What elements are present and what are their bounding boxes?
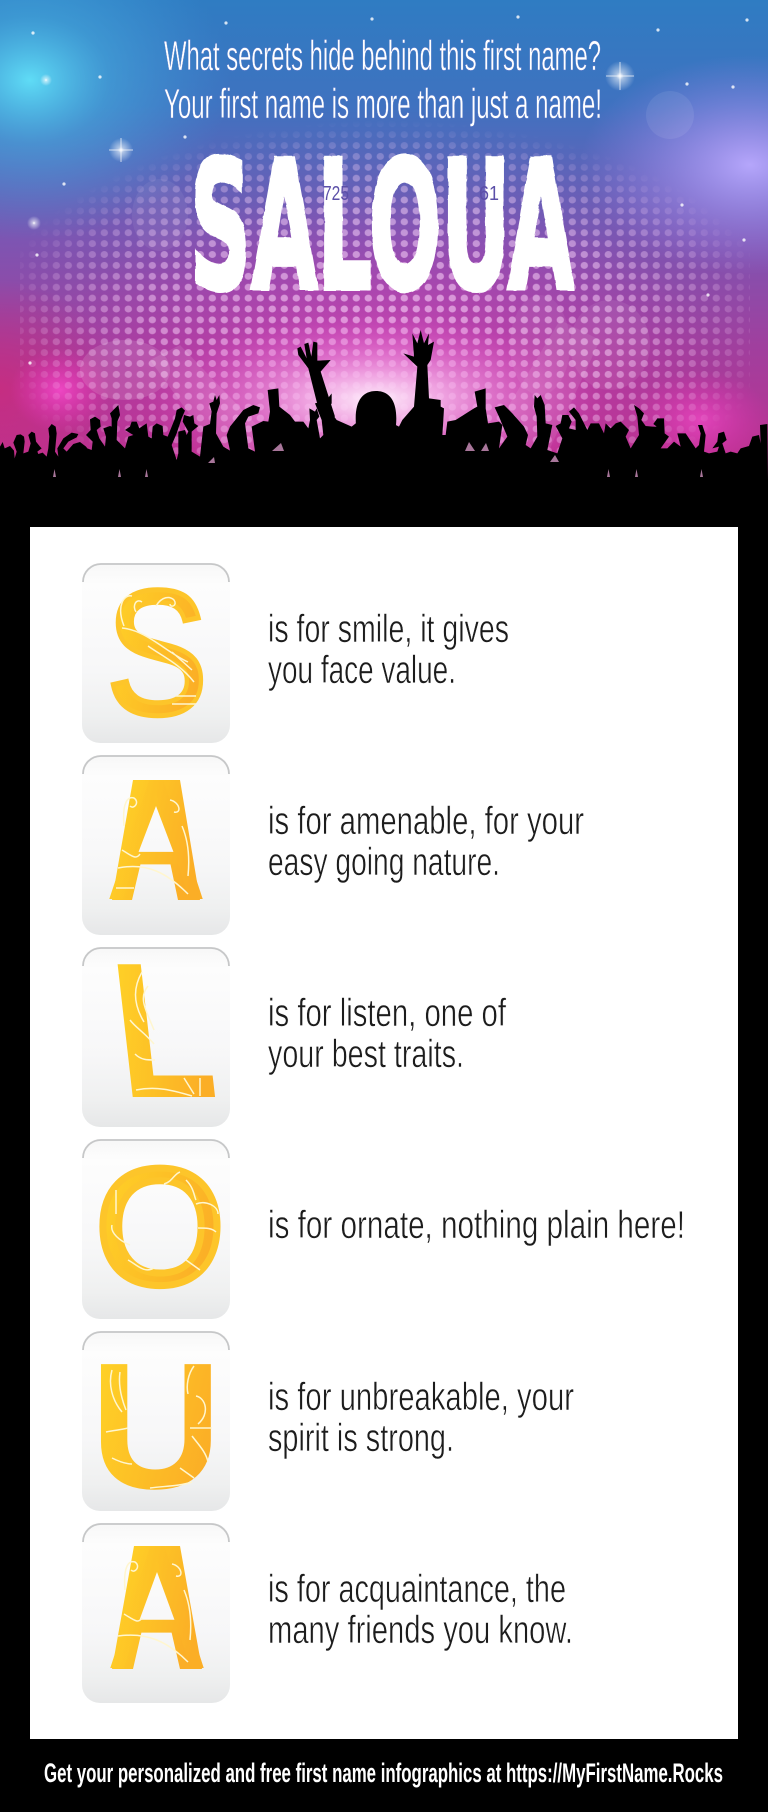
text A second: many friends you know. bbox=[268, 1609, 573, 1652]
text S bbox=[268, 608, 509, 692]
tile S: S bbox=[106, 553, 208, 752]
text S: you face value. bbox=[268, 649, 456, 692]
flared letter backing second bbox=[112, 1546, 202, 1669]
title: name bbox=[190, 123, 574, 330]
text A: easy going nature. bbox=[268, 841, 500, 884]
text L: your best traits. bbox=[268, 1033, 464, 1076]
text U: is for unbreakable, your bbox=[268, 1376, 574, 1419]
crowd gaps bbox=[53, 442, 703, 477]
raised hand left bbox=[297, 342, 335, 420]
tile A second: A bbox=[110, 1510, 204, 1706]
left crowd bbox=[0, 388, 384, 480]
crowd silhouette bbox=[0, 330, 768, 529]
text U: spirit is strong. bbox=[268, 1417, 454, 1460]
tile L: L bbox=[102, 924, 225, 1139]
sparkles bbox=[27, 15, 749, 365]
distress marks: 61 bbox=[479, 183, 499, 205]
text L: is for listen, one of bbox=[268, 992, 506, 1035]
text A second bbox=[268, 1568, 573, 1652]
row L bbox=[82, 924, 506, 1139]
row A second bbox=[82, 1510, 573, 1706]
row O bbox=[82, 1135, 685, 1320]
heading: tagline bbox=[164, 32, 602, 127]
right crowd bbox=[384, 330, 768, 480]
distress marks bbox=[323, 183, 499, 205]
text S: is for smile, it gives bbox=[268, 608, 509, 651]
text A second: is for acquaintance, the bbox=[268, 1568, 566, 1611]
text L bbox=[268, 992, 506, 1076]
text U bbox=[268, 1376, 574, 1460]
panel: name meanings bbox=[30, 527, 738, 1739]
tile O: O bbox=[95, 1135, 225, 1320]
text A bbox=[268, 800, 584, 884]
flared letter backing bbox=[112, 780, 200, 900]
tile A: A bbox=[109, 744, 203, 936]
row A bbox=[82, 744, 584, 936]
text A: is for amenable, for your bbox=[268, 800, 584, 843]
row U bbox=[82, 1326, 574, 1527]
header stage background bbox=[0, 0, 768, 530]
central head bbox=[352, 391, 398, 440]
row S bbox=[82, 553, 509, 752]
distress marks: 725 bbox=[323, 183, 349, 205]
tile U: U bbox=[90, 1326, 222, 1527]
